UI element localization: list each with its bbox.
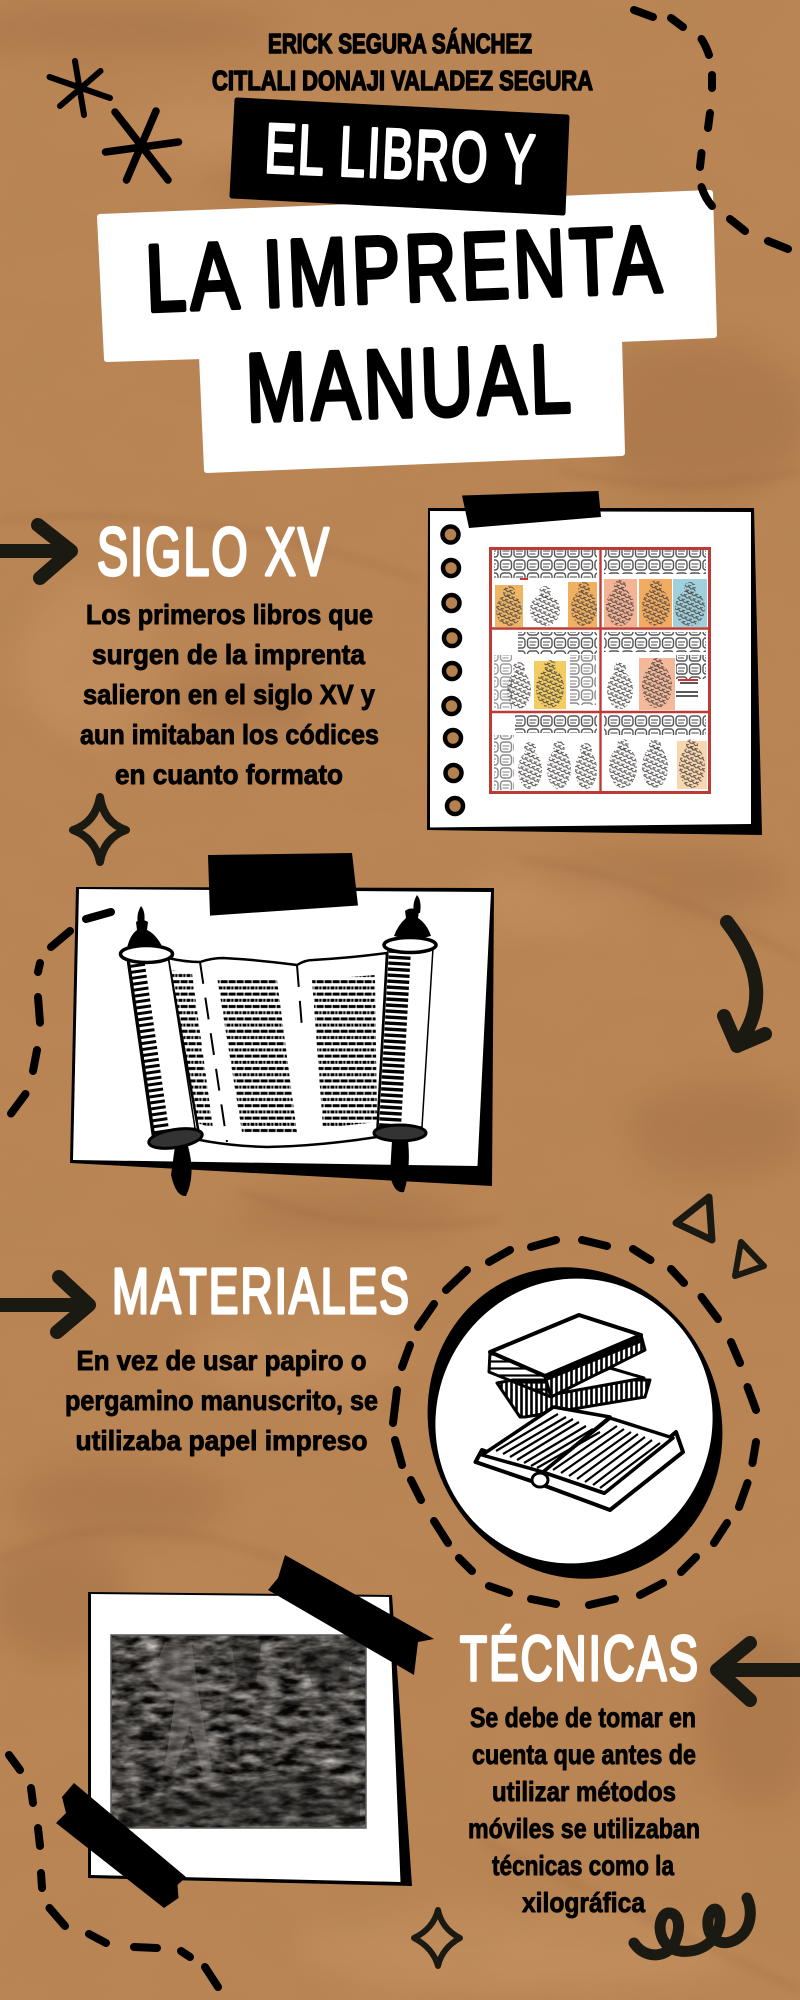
authors: CITLALI DONAJI VALADEZ SEGURA (212, 65, 593, 96)
title black tag (232, 100, 567, 213)
decoration: left dashed curve (11, 931, 70, 1114)
text block: tecnicas (468, 1702, 700, 1918)
heading: siglo XV: SIGLO XV (97, 514, 331, 590)
text block: tecnicas: xilográfica (522, 1887, 645, 1918)
text block: siglo XV: aun imitaban los códices (80, 719, 379, 750)
decoration: four point star (73, 797, 126, 862)
decoration: bottom left dashed curve (9, 1755, 218, 1987)
text block: siglo XV: en cuanto formato (115, 759, 343, 790)
text block: materiales: utilizaba papel impreso (76, 1425, 368, 1456)
text block: tecnicas: cuenta que antes de (472, 1739, 696, 1770)
title white panel (100, 193, 714, 470)
text block: tecnicas: técnicas como la (492, 1850, 674, 1881)
text block: materiales (65, 1345, 378, 1456)
title line: MANUAL: MANUAL (244, 325, 576, 442)
dashed ring (393, 1240, 756, 1605)
decoration: squiggle (634, 1898, 750, 1955)
tape (208, 853, 358, 916)
dash on card (86, 912, 111, 919)
tape (462, 491, 601, 528)
decoration: triangles (676, 1197, 764, 1276)
text block: materiales: pergamino manuscrito, se (65, 1385, 378, 1416)
codex image (489, 547, 711, 794)
text block: siglo XV: Los primeros libros que (86, 599, 373, 630)
left roll (127, 956, 195, 1140)
authors: ERICK SEGURA SÁNCHEZ (268, 28, 532, 59)
notebook holes (442, 526, 463, 814)
arrow: tecnicas (717, 1643, 800, 1700)
panel: codex card (427, 491, 762, 835)
text block: siglo XV (80, 599, 379, 790)
decoration: curved arrow (724, 922, 765, 1046)
panel: woodcut card (56, 1555, 434, 1908)
tape top right (268, 1555, 434, 1675)
arrow: siglo XV (0, 525, 71, 578)
text block: siglo XV: surgen de la imprenta (92, 639, 365, 670)
woodcut image (111, 1635, 366, 1828)
right roll (378, 948, 433, 1127)
text block: tecnicas: móviles se utilizaban (468, 1813, 700, 1844)
title line: EL LIBRO Y: EL LIBRO Y (263, 109, 538, 199)
dash over title panel (702, 187, 712, 206)
heading: tecnicas: TÉCNICAS (460, 1624, 700, 1694)
text block: tecnicas: Se debe de tomar en (470, 1702, 696, 1733)
panel: scroll card (70, 853, 494, 1196)
books illustration (476, 1315, 683, 1510)
tape bottom left (56, 1783, 186, 1908)
text block: siglo XV: salieron en el siglo XV y (83, 679, 375, 710)
decoration: top dashed curve (634, 10, 788, 249)
panel: books circle (377, 1219, 773, 1627)
decoration: bottom four point star (414, 1910, 460, 1966)
text block: tecnicas: utilizar métodos (492, 1776, 676, 1807)
scroll illustration (120, 895, 436, 1196)
text block: materiales: En vez de usar papiro o (76, 1345, 366, 1376)
arrow: materiales (0, 1277, 89, 1332)
heading: materiales: MATERIALES (112, 1255, 411, 1327)
authors (212, 28, 593, 96)
decoration: asterisks (50, 61, 178, 180)
